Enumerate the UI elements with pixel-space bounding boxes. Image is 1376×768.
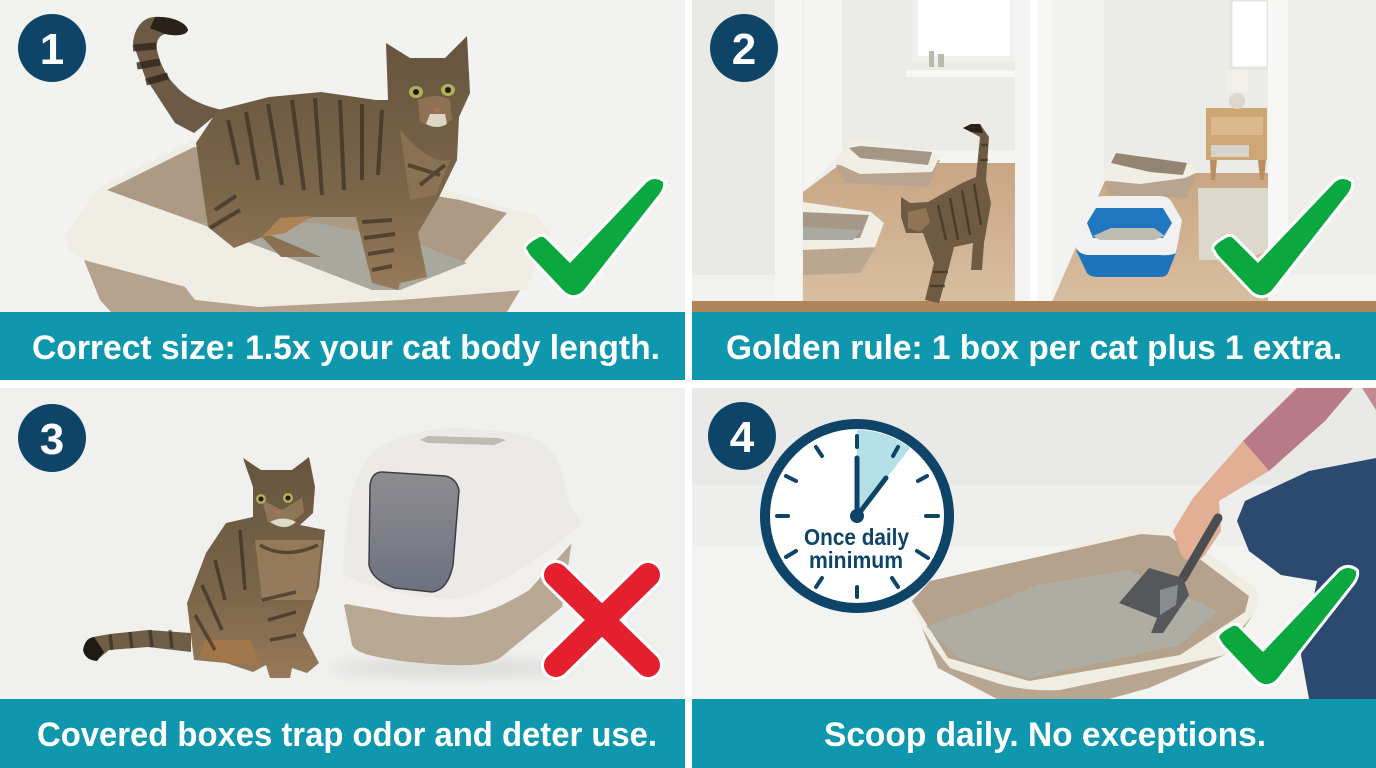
panel 2: golden rule [692,0,1376,380]
icon: clock, once daily minimum [760,419,954,613]
litter box, right room [1100,151,1196,198]
open litter box with litter [910,527,1259,699]
panel 4: scoop daily [692,388,1376,768]
panel 1: correct size [0,0,685,380]
step number badge 3: 3 [40,415,64,464]
icon: green check mark [1214,179,1351,295]
icon: green check mark [1219,568,1356,684]
icon: sitting tabby cat [83,457,325,678]
caption banner 2 [692,312,1376,380]
icon: clock, once daily minimum: Once daily [804,524,909,550]
step number badge 1: 1 [40,25,64,74]
litter box, far room [836,138,941,187]
floor shadow under covered box [330,660,570,676]
room background with doorways [692,0,1376,312]
step number badge 1 [18,14,86,82]
blue litter box [1076,196,1182,277]
caption banner 1: Correct size: 1.5x your cat body length. [32,329,660,367]
caption banner 3: Covered boxes trap odor and deter use. [37,716,657,754]
step number badge 2: 2 [732,25,756,74]
panel 3: covered boxes [0,388,685,768]
icon: red cross [556,575,648,665]
icon: arm and scoop [1119,388,1376,699]
caption banner 1 [0,312,685,380]
caption banner 3 [0,699,685,768]
icon: clock, once daily minimum: minimum [809,547,903,573]
step number badge 4: 4 [730,413,755,462]
caption banner 4: Scoop daily. No exceptions. [824,716,1266,754]
caption banner 2: Golden rule: 1 box per cat plus 1 extra. [726,329,1342,367]
icon: standing tabby cat [133,17,470,290]
caption banner 4 [692,699,1376,768]
icon: walking cat [901,124,991,303]
litter box, near door [803,202,884,275]
step number badge 4 [708,402,776,470]
icon: green check mark [526,179,663,295]
icon: covered litter box [333,428,582,665]
step number badge 2 [710,14,778,82]
step number badge 3 [18,404,86,472]
icon: open litter box [68,142,548,312]
